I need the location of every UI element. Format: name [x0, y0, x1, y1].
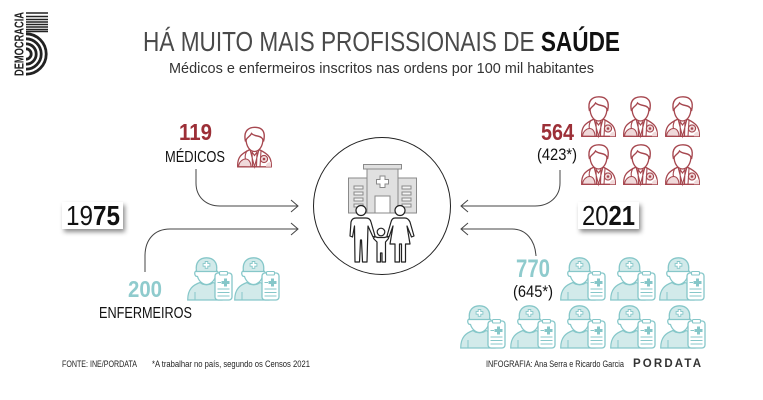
central circle with hospital and family — [314, 138, 450, 274]
arrow: enfermeiros 1975 — [145, 223, 298, 272]
stat: 119 médicos: 119 — [179, 119, 212, 145]
arrow: médicos 1975 — [196, 169, 298, 212]
icon: family — [350, 206, 414, 262]
stat: 200 enfermeiros — [99, 276, 192, 322]
icon: hospital — [348, 164, 416, 213]
stat: 770 enfermeiros 2021: (645*) — [513, 282, 553, 301]
footer: source: FONTE: INE/PORDATA — [62, 359, 137, 369]
stat: 564 médicos 2021: 564 — [541, 119, 574, 145]
footer: note: *A trabalhar no país, segundo os Censos 2021 — [152, 359, 310, 369]
stat: 200 enfermeiros: ENFERMEIROS — [99, 305, 192, 322]
icon: doctor 1975 — [238, 127, 271, 167]
stat: 119 médicos — [165, 119, 225, 166]
title: HÁ MUITO MAIS PROFISSIONAIS DE SAÚDE — [143, 26, 620, 57]
stat: 200 enfermeiros: 200 — [128, 276, 162, 302]
icons: nurses 2021 — [461, 258, 705, 348]
stat: 564 médicos 2021: (423*) — [537, 146, 577, 164]
year label 1975: 1975 — [66, 200, 120, 231]
logo: Pordata: PORDATA — [633, 358, 701, 370]
subtitle: Médicos e enfermeiros inscritos nas ordens por 100 mil habitantes — [169, 60, 594, 77]
stat: 119 médicos: MÉDICOS — [165, 147, 225, 166]
footer: credits: INFOGRAFIA: Ana Serra e Ricardo Garcia — [486, 359, 625, 370]
arrow: médicos 2021 — [461, 170, 560, 212]
icons: nurses 1975 — [188, 258, 279, 300]
stat: 770 enfermeiros 2021 — [513, 255, 553, 301]
stat: 770 enfermeiros 2021: 770 — [516, 255, 550, 283]
icons: doctors 2021 — [582, 97, 699, 184]
stat: 564 médicos 2021 — [537, 119, 577, 164]
year label 2021: 2021 — [582, 200, 635, 231]
logo: Democracia 5 — [12, 12, 48, 76]
arrow: enfermeiros 2021 — [461, 223, 536, 256]
